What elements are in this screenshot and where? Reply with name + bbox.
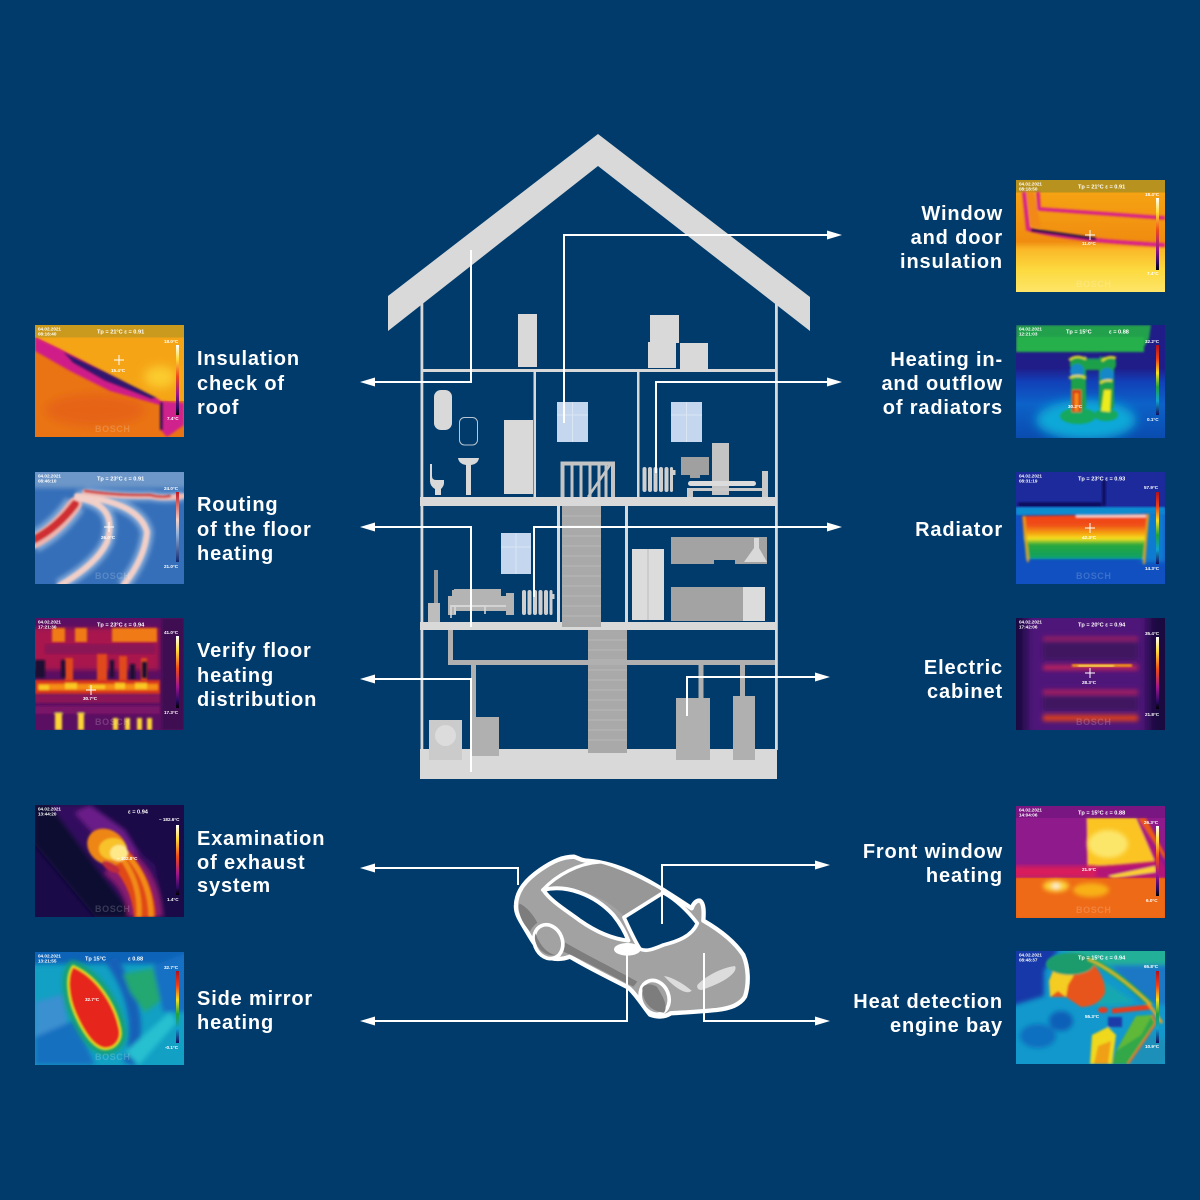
arrow: side mirror (360, 955, 627, 1026)
side window (543, 888, 628, 941)
thermal image: window: 08:18:50 (1019, 186, 1038, 192)
thermal image: exhaust: ε = 0.94 (128, 810, 149, 816)
label: routing of the floor heating: Routing (197, 494, 278, 516)
label: verify floor heating distribution: heating (197, 665, 274, 687)
thermal image: side mirror: 32.7°C (164, 965, 179, 970)
label: front window heating: heating (926, 865, 1003, 887)
thermal image: engine bay: 65.8°C (1144, 964, 1159, 969)
thermal image: floor heating distribution (35, 618, 184, 730)
thermal image: exhaust: 1.4°C (167, 897, 179, 902)
thermal image: radiator valves: Tp = 15°C (1066, 330, 1092, 336)
bedroom furniture (681, 443, 768, 497)
thermal image: electric cabinet: 28.3°C (1082, 680, 1097, 685)
thermal image: radiator: 57.9°C (1144, 485, 1159, 490)
stair balustrade (562, 464, 613, 497)
label: electric cabinet: Electric (924, 657, 1003, 679)
staircases (562, 506, 627, 753)
roof (388, 134, 810, 331)
arrow: front window (662, 860, 830, 924)
thermal image: radiator valves (1016, 325, 1165, 438)
thermal image: radiator valves: 0.1°C (1147, 417, 1159, 422)
label: insulation check of roof: roof (197, 397, 239, 419)
thermal image: window: 7.4°C (1147, 271, 1159, 276)
headlights (664, 966, 736, 992)
arrow: floor heating distribution (360, 674, 471, 772)
thermal image: engine bay: Tp = 15°C ε = 0.94 (1078, 956, 1126, 962)
car body (516, 857, 748, 1017)
label: heat detection engine bay: engine bay (890, 1015, 1003, 1037)
thermal image: front window: 6.0°C (1146, 898, 1158, 903)
thermal image: roof: BOSCH (95, 424, 131, 434)
thermal image: side mirror: ε 0.88 (128, 956, 143, 962)
thermal image: radiator valves: 32.2°C (1145, 339, 1160, 344)
arrow: window (564, 230, 842, 423)
label: window and door insulation: insulation (900, 251, 1003, 273)
thermal image: radiator valves: ε = 0.88 (1109, 330, 1129, 336)
thermal image: exhaust: 13:44:20 (38, 812, 57, 816)
label: examination of exhaust system: Examination (197, 828, 325, 850)
thermal image: engine bay: 04.02.2021 (1019, 952, 1042, 958)
thermal image: side mirror: -0.1°C (165, 1045, 179, 1050)
windows (501, 402, 702, 574)
thermal image: side mirror: 13:21:55 (38, 958, 57, 964)
thermal image: engine bay (1016, 951, 1165, 1064)
thermal image: window: 04.02.2021 (1019, 182, 1042, 186)
thermal image: radiator: Tp = 23°C ε = 0.93 (1078, 476, 1125, 482)
thermal image: engine bay: 08:48:37 (1019, 958, 1038, 962)
thermal image: radiator valves: 04.02.2021 (1019, 326, 1042, 332)
thermal image: roof: 08:16:40 (38, 332, 57, 336)
label: routing of the floor heating: heating (197, 543, 274, 565)
thermal image: radiator: 08:31:19 (1019, 478, 1038, 484)
thermal image: side mirror: 32.7°C (85, 997, 100, 1002)
thermal image: electric cabinet (1016, 618, 1165, 730)
arrow: engine bay (704, 953, 830, 1026)
thermal image: radiator (1016, 472, 1165, 584)
label: heat detection engine bay: Heat detection (853, 991, 1003, 1013)
thermal image: roof: Tp = 21°C ε = 0.91 (97, 330, 144, 336)
thermal image: floor heating: 24.0°C (164, 486, 179, 491)
thermal image: engine bay: 10.9°C (1145, 1044, 1160, 1049)
arrow: roof (360, 250, 471, 386)
label: front window heating: Front window (863, 841, 1003, 863)
thermal image: front window (1016, 806, 1165, 918)
car illustration (516, 857, 748, 1019)
rear wheel (529, 920, 568, 963)
thermal image: radiator valves: 30.2°C (1068, 404, 1083, 409)
thermal image: floor heating distribution: 41.0°C (164, 630, 179, 635)
label: window and door insulation: Window (921, 203, 1003, 225)
label: examination of exhaust system: of exhaust (197, 852, 306, 874)
storage tanks (676, 696, 755, 760)
label: insulation check of roof: check of (197, 373, 285, 395)
washing machine (429, 720, 462, 760)
thermal image: roof: 15.4°C (111, 368, 126, 373)
arrow: exhaust (360, 864, 518, 885)
heating unit (470, 717, 499, 756)
thermal image: front window: 04.02.2021 (1019, 808, 1042, 812)
thermal image: side mirror: BOSCH (95, 1052, 131, 1062)
thermal image: floor heating distribution: 30.7°C (83, 696, 98, 701)
label: window and door insulation: and door (911, 227, 1003, 249)
thermal image: exhaust (35, 805, 184, 917)
windshield (624, 893, 697, 950)
thermal image: radiator: 42.3°C (1082, 535, 1097, 540)
label: examination of exhaust system: system (197, 875, 271, 897)
label: radiator: Radiator (915, 519, 1003, 541)
house walls and floors (420, 300, 778, 779)
arrow: floor heating (360, 522, 471, 627)
thermal image: front window: Tp = 15°C ε = 0.88 (1078, 810, 1125, 816)
thermal image: floor heating distribution: 17:21:30 (38, 624, 57, 630)
arrow: electric cabinet (687, 672, 830, 716)
thermal image: side mirror: Tp 15°C (85, 956, 106, 962)
thermal image: electric cabinet: 17:42:06 (1019, 624, 1038, 630)
thermal image: floor heating: 26.0°C (101, 535, 116, 540)
thermal image: window (1016, 180, 1165, 292)
thermal image: radiator: 14.3°C (1145, 566, 1160, 571)
thermal image: floor heating distribution: 04.02.2021 (38, 620, 61, 624)
label: electric cabinet: cabinet (927, 681, 1003, 703)
thermal image: roof: 04.02.2021 (38, 326, 61, 332)
house illustration (388, 134, 810, 779)
thermal image: floor heating: BOSCH (95, 571, 131, 581)
arrow: heating in and outflow (656, 378, 842, 473)
thermal image: window: 11.0°C (1082, 241, 1097, 246)
connector arrows (360, 230, 842, 1026)
thermal image: window: 18.4°C (1145, 192, 1160, 197)
label: heating in- and outflow of radiators: of radiators (883, 397, 1003, 419)
thermal image: exhaust: – 102.0°C (117, 856, 138, 861)
thermal image: roof (35, 325, 184, 437)
kitchen (632, 537, 767, 621)
thermal image: floor heating (35, 472, 184, 584)
thermal image: side mirror (35, 952, 184, 1065)
side mirror (614, 943, 641, 956)
label: verify floor heating distribution: distribution (197, 689, 317, 711)
label: insulation check of roof: Insulation (197, 348, 300, 370)
lower radiator (522, 590, 554, 615)
thermal image: radiator: BOSCH (1076, 571, 1112, 581)
thermal image: window: Tp = 21°C ε = 0.91 (1078, 184, 1125, 190)
thermal image: front window: 26.3°C (1144, 820, 1159, 825)
bathroom fixtures (430, 390, 533, 495)
thermal image: window: BOSCH (1076, 279, 1112, 289)
thermal image: exhaust: 04.02.2021 (38, 806, 61, 812)
arrow: radiator (534, 522, 842, 597)
thermal image: radiator: 04.02.2021 (1019, 474, 1042, 478)
thermal image: exhaust: BOSCH (95, 904, 131, 914)
attic storage boxes (518, 314, 708, 370)
thermal image: floor heating distribution: 17.3°C (164, 710, 179, 715)
thermal image: front window: 14:04:06 (1019, 812, 1038, 818)
thermal image: floor heating: 21.0°C (164, 564, 179, 569)
label: side mirror heating: Side mirror (197, 988, 313, 1010)
rear shadow and sill (519, 903, 637, 987)
label: heating in- and outflow of radiators: and outflow (881, 373, 1003, 395)
thermal image: floor heating distribution: BOSCH (95, 717, 131, 727)
thermal image: engine bay: 55.3°C (1085, 1014, 1100, 1019)
thermal image: floor heating: 08:46:10 (38, 478, 57, 484)
upper radiator (642, 467, 676, 492)
thermal image: electric cabinet: BOSCH (1076, 717, 1112, 727)
thermal image: front window: BOSCH (1076, 905, 1112, 915)
thermal image: floor heating distribution: Tp = 23°C ε = 0.94 (97, 622, 145, 628)
thermal image: electric cabinet: 35.4°C (1145, 631, 1160, 636)
basement pipes (448, 630, 775, 718)
thermal image: front window: 21.9°C (1082, 867, 1097, 872)
front wheel (635, 976, 674, 1019)
label: verify floor heating distribution: Verify floor (197, 640, 312, 662)
thermal image: electric cabinet: 21.8°C (1145, 712, 1160, 717)
thermal image: electric cabinet: 04.02.2021 (1019, 620, 1042, 624)
thermal image: electric cabinet: Tp = 20°C ε = 0.94 (1078, 622, 1126, 628)
thermal image: roof: 7.4°C (167, 416, 179, 421)
label: side mirror heating: heating (197, 1012, 274, 1034)
thermal image: side mirror: 04.02.2021 (38, 954, 61, 958)
roof (543, 863, 662, 916)
thermal image: roof: 18.0°C (164, 339, 179, 344)
sofa and table (448, 589, 514, 618)
living room lamp (428, 570, 440, 622)
thermal image: radiator valves: 12:21:03 (1019, 332, 1038, 336)
thermal image: exhaust: – 182.6°C (159, 817, 180, 822)
label: heating in- and outflow of radiators: Heating in- (890, 349, 1003, 371)
label: routing of the floor heating: of the floor (197, 519, 312, 541)
thermal image: floor heating: Tp = 23°C ε = 0.91 (97, 476, 144, 482)
thermal image: floor heating: 04.02.2021 (38, 474, 61, 478)
